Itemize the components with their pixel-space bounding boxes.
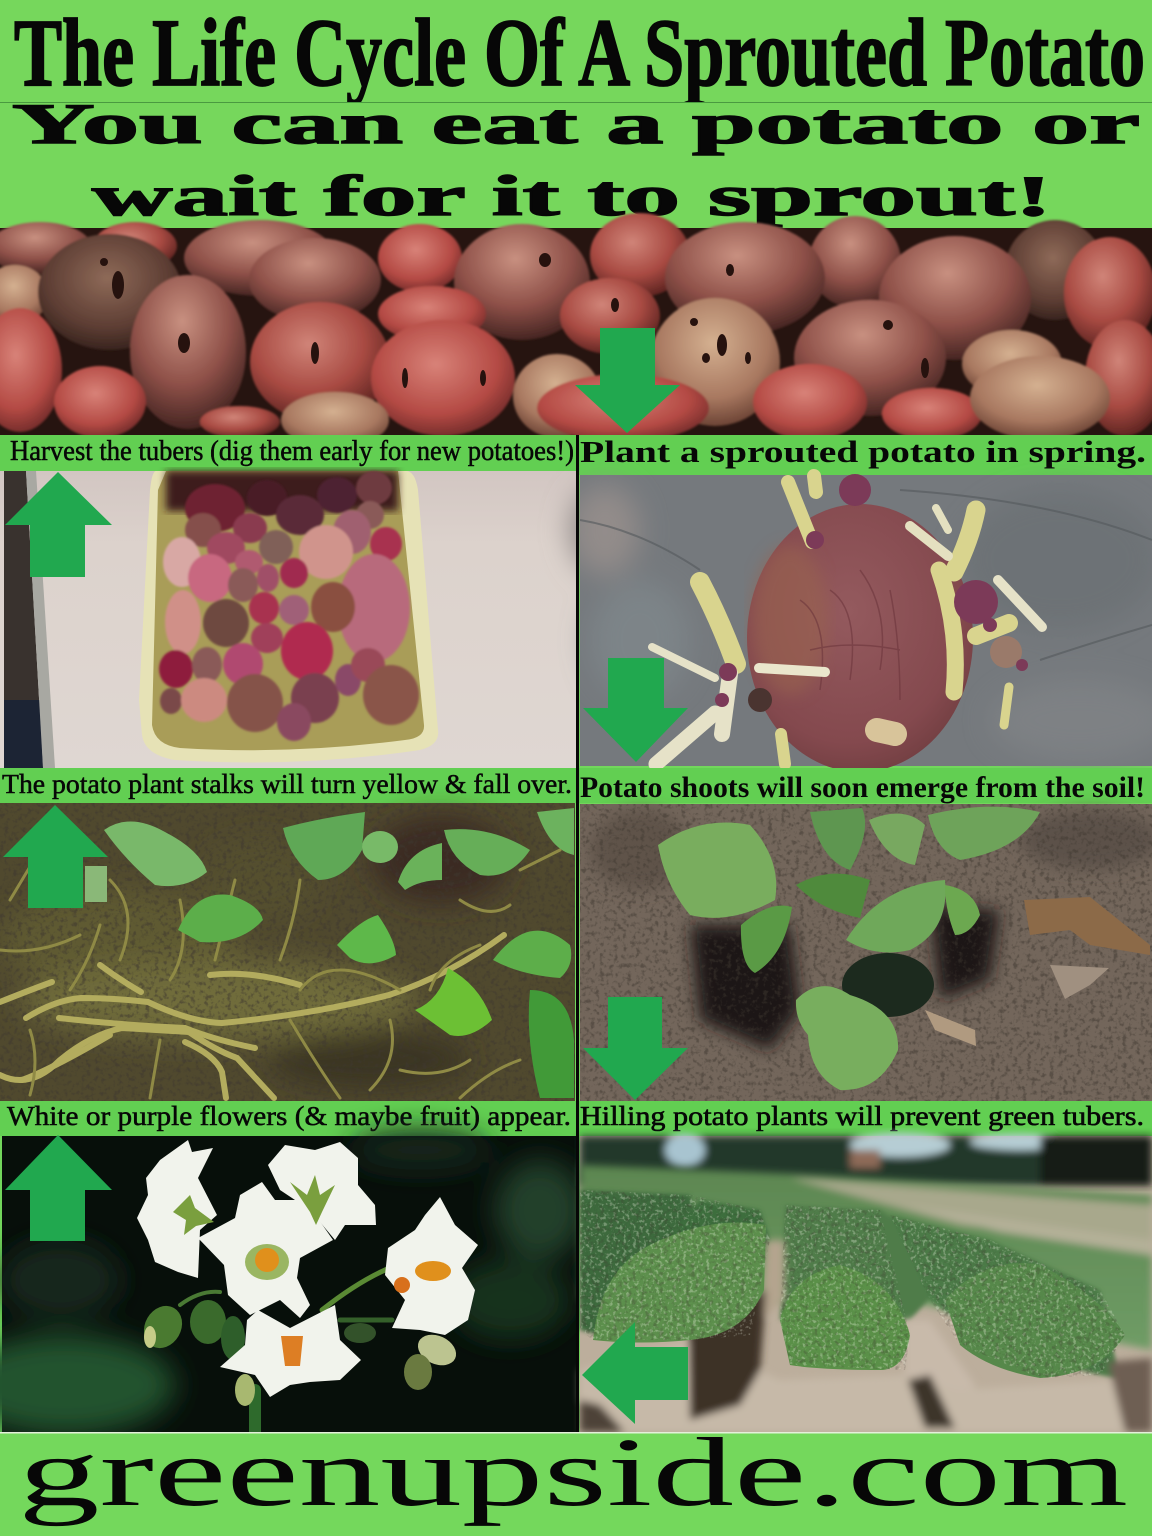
subtitle banner (0, 93, 1152, 228)
arrow: up to caption (3, 805, 108, 908)
ceramic dish (139, 471, 438, 762)
caption band: row 3: Hilling potato plants will prevent green tubers. (580, 1101, 1144, 1131)
arrow: down to hilling (583, 997, 688, 1100)
caption band: row 3 (0, 1101, 1152, 1136)
potato body (747, 504, 973, 772)
caption band: row 2: The potato plant stalks will turn yellow & fall over. (2, 769, 572, 799)
potato plant rows (593, 1222, 1125, 1378)
caption band: row 3: White or purple flowers (& maybe fruit) appear. (7, 1101, 571, 1131)
footer banner: website: greenupside.com (18, 1419, 1128, 1527)
blurred sky and treeline (580, 1133, 1152, 1186)
arrow: left to flowers (582, 1322, 688, 1424)
arrow: down to planting (575, 328, 680, 433)
tubers (159, 471, 419, 741)
caption band: row 1: Plant a sprouted potato in spring. (580, 434, 1146, 469)
photo: hilled potato rows in field (580, 1133, 1152, 1432)
arrow: down to shoots (583, 658, 688, 762)
dark strip at left (4, 471, 43, 768)
background field (580, 1165, 1152, 1350)
arrow: up to caption (5, 1135, 112, 1241)
soil furrows (580, 1240, 1152, 1432)
caption band: row 1 (0, 434, 1152, 475)
caption band: row 1: Harvest the tubers (dig them early for new potatoes!) (10, 435, 574, 467)
caption band: row 2: Potato shoots will soon emerge from the soil! (580, 771, 1145, 804)
arrow: up to caption (5, 472, 112, 577)
subtitle banner: You can eat a potato or (12, 93, 1140, 156)
sprouts (652, 476, 1042, 764)
flower calyx (173, 1175, 335, 1280)
photo: yellowing fallen stalks (0, 803, 575, 1103)
stems and buds (180, 1267, 392, 1432)
leaves (85, 808, 574, 1098)
caption band: row 2 (0, 768, 1152, 804)
flowers (137, 1140, 478, 1397)
subtitle banner: wait for it to sprout! (92, 165, 1052, 228)
fallen stalks (0, 850, 560, 1098)
footer banner: website (0, 1419, 1152, 1536)
photo: harvested tubers in dish (0, 471, 577, 768)
seedling leaves (658, 807, 1040, 1090)
photo: potato shoots in soil (580, 804, 1152, 1101)
photo: sprouted potato on stone (570, 474, 1152, 772)
photo: white potato flowers (0, 1130, 585, 1435)
dead leaves (925, 897, 1150, 1046)
photo: pile of red potatoes (0, 213, 1152, 448)
